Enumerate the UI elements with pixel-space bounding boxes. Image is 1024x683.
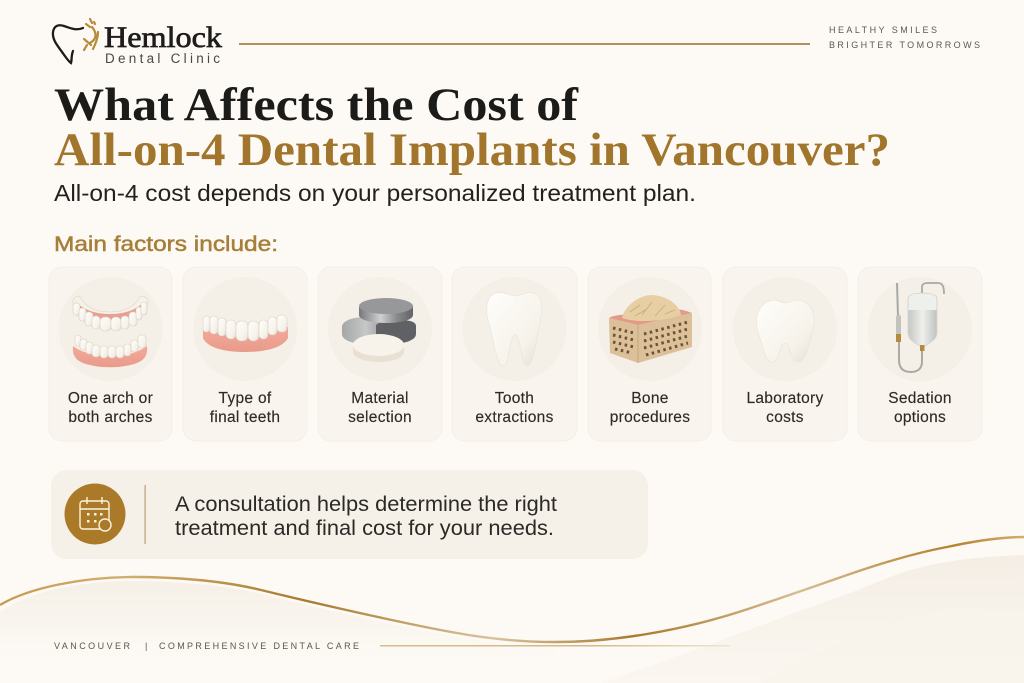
footer: COMPREHENSIVE DENTAL CARE: [159, 641, 359, 651]
callout text: [175, 493, 557, 540]
tagline: HEALTHY SMILES: [829, 25, 937, 35]
icon: tooth: [487, 293, 542, 366]
panel: laboratory costs: [723, 267, 847, 441]
subtitle: All-on-4 cost depends on your personalized treatment plan.: [54, 180, 696, 206]
label: extractions: [475, 409, 554, 426]
title: All-on-4 Dental Implants in Vancouver?: [54, 124, 890, 176]
panel: type of final teeth: [183, 267, 307, 441]
label: options: [894, 409, 946, 426]
panel: tooth extractions: [452, 267, 577, 441]
label: both arches: [68, 409, 153, 426]
logo subtitle: Dental Clinic: [105, 51, 220, 66]
panel: material selection: [318, 267, 442, 441]
label: Laboratory: [746, 390, 824, 407]
title: [54, 79, 890, 176]
icon: bone block: [609, 295, 692, 363]
panel: one arch or both arches: [49, 267, 172, 441]
divider: [144, 485, 146, 544]
logo: [53, 19, 222, 66]
logo name: Hemlock: [104, 21, 222, 54]
tagline: [829, 25, 980, 50]
footer: |: [145, 641, 147, 651]
header rule: [239, 43, 810, 45]
label: Material: [351, 390, 409, 407]
icon: single denture: [203, 315, 288, 352]
panel: sedation options: [858, 267, 982, 441]
footer: [54, 641, 730, 651]
label: Bone: [631, 390, 669, 407]
label: costs: [766, 409, 804, 426]
label: One arch or: [68, 390, 153, 407]
icon: IV bag and sedation handpiece: [896, 283, 944, 372]
icon: molar: [756, 300, 814, 362]
label: selection: [348, 409, 412, 426]
label: Tooth: [495, 390, 534, 407]
callout: consultation: [51, 470, 648, 559]
label: Type of: [219, 390, 272, 407]
background wave shading: [0, 555, 1024, 683]
icon: material discs: [342, 298, 416, 362]
gold wave: [0, 537, 1024, 642]
title: What Affects the Cost of: [54, 79, 579, 131]
tagline: BRIGHTER TOMORROWS: [829, 40, 980, 50]
icon: calendar: [64, 484, 126, 544]
label: procedures: [610, 409, 690, 426]
panel: bone procedures: [588, 267, 711, 441]
label: final teeth: [210, 409, 280, 426]
icon: two dentures: [73, 296, 148, 367]
section heading: Main factors include:: [54, 233, 278, 256]
footer: VANCOUVER: [54, 641, 130, 651]
label: Sedation: [888, 390, 952, 407]
callout text: A consultation helps determine the right: [175, 493, 557, 516]
callout text: treatment and final cost for your needs.: [175, 517, 554, 540]
icon: tooth outline with gold figure: [53, 19, 98, 63]
